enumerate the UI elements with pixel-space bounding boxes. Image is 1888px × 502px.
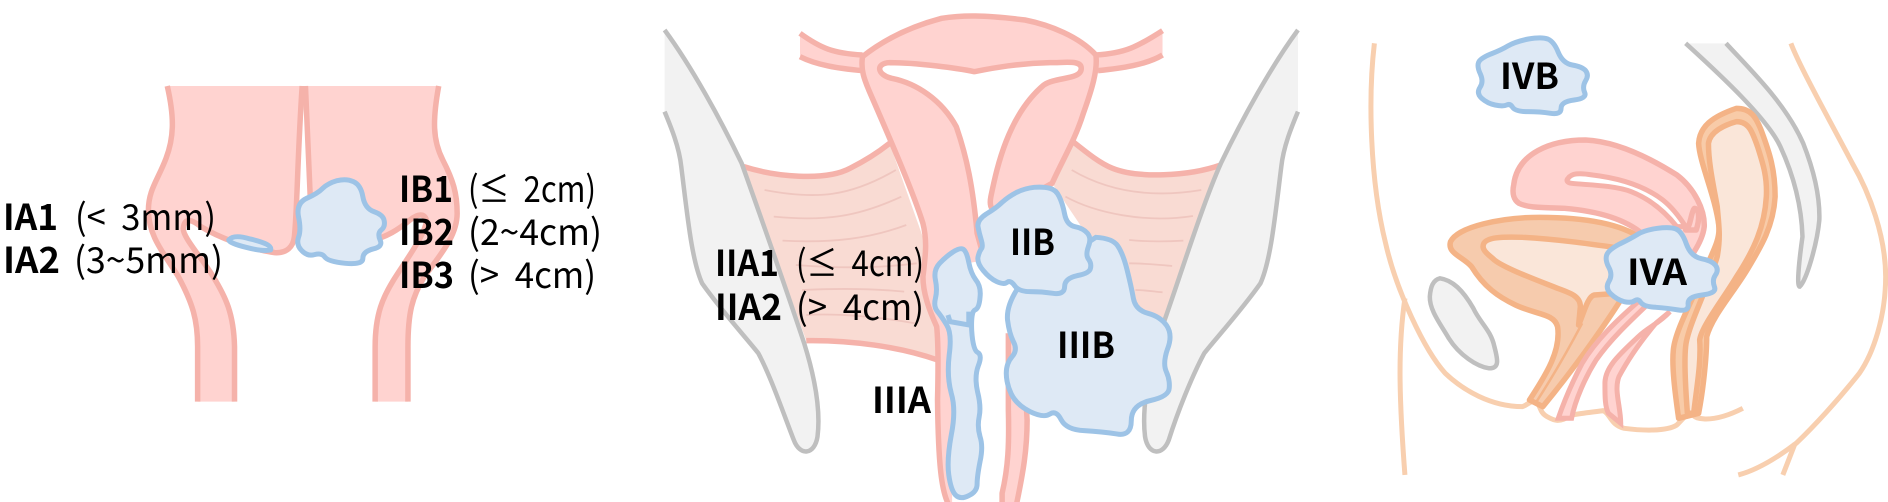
panel: stage IV sagittal diagram xyxy=(1371,38,1886,475)
anatomy: parametrial ligaments xyxy=(744,142,1221,360)
label: IB3 xyxy=(399,247,596,299)
label: IVA: IVA xyxy=(1627,244,1688,296)
anatomy: pubic bone xyxy=(1430,278,1497,368)
anatomy: bladder and urethra xyxy=(1450,217,1642,407)
label: IIB: IIB xyxy=(1010,214,1055,266)
anatomy: right pelvic bone xyxy=(1144,30,1298,451)
label: IVB: IVB xyxy=(1500,48,1559,100)
label: IIIA: IIIA xyxy=(872,372,932,424)
label: IB1: (≤ 2cm) xyxy=(468,161,596,213)
anatomy: rectum xyxy=(1673,108,1775,418)
label: IIIB: IIIB xyxy=(1057,317,1115,369)
label: IB2: IB2 xyxy=(399,204,454,256)
anatomy: uterus xyxy=(1513,140,1704,257)
label: IIA1: IIA1 xyxy=(715,235,779,287)
tumor: IVB lesion xyxy=(1478,38,1587,114)
label: IIA1: (≤ 4cm) xyxy=(796,235,924,287)
anatomy: left pelvic bone xyxy=(665,30,818,451)
label: IA1: IA1 xyxy=(3,189,58,241)
tumor: IA microscopic lesion xyxy=(229,237,271,250)
anatomy: sacrum xyxy=(1686,43,1819,287)
tumor: IIB lesion xyxy=(978,187,1091,294)
panel: stage II-III pelvic diagram xyxy=(665,16,1298,502)
label: IA2: IA2 xyxy=(3,232,60,284)
anatomy: fallopian tubes xyxy=(800,31,1163,71)
label: IB3: (> 4cm) xyxy=(468,247,596,299)
anatomy: uterus, cervix and left vaginal wall xyxy=(862,16,1096,502)
label: IB1 xyxy=(399,161,596,213)
label: IA1 xyxy=(3,189,216,241)
label: IIA2 xyxy=(715,279,924,331)
anatomy: body outline xyxy=(1371,43,1886,475)
label: IB2: (2~4cm) xyxy=(468,204,602,256)
tumor: IIIB lesion xyxy=(1006,237,1170,434)
anatomy: cervix and vaginal fornix xyxy=(148,86,457,402)
label: IIA2: (> 4cm) xyxy=(796,279,924,331)
label: IA1: (< 3mm) xyxy=(75,189,216,241)
label: IB1: IB1 xyxy=(399,161,453,213)
tumor: IVA lesion xyxy=(1606,228,1717,310)
label: IA2: (3~5mm) xyxy=(74,232,223,284)
tumor: IB lesion xyxy=(298,180,384,264)
label: IIA1 xyxy=(715,235,924,287)
label: IA2 xyxy=(3,232,223,284)
label: IIA2: IIA2 xyxy=(715,279,782,331)
tumor: IIA and IIIA lesion xyxy=(935,249,982,498)
panel: stage I cervix diagram xyxy=(3,86,602,402)
anatomy: vagina xyxy=(1558,302,1670,423)
label: IB3: IB3 xyxy=(399,247,454,299)
label: IB2 xyxy=(399,204,602,256)
